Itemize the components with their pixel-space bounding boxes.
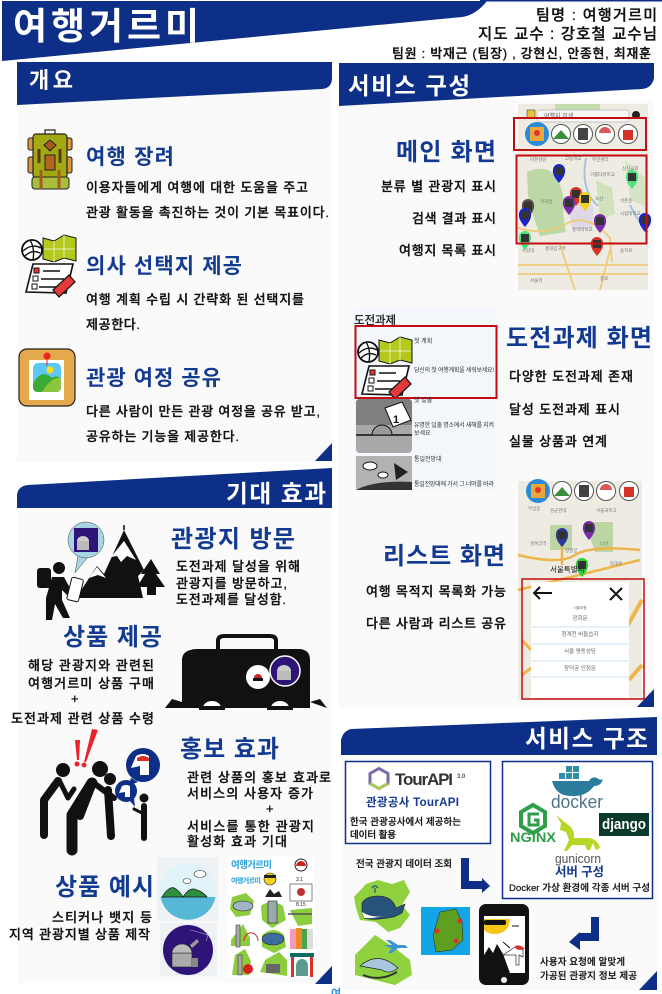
challenge screen screenshot: 첫 계획 (414, 337, 432, 345)
text: site visit: 도전과제 달성을 위해 (176, 559, 300, 574)
heading: product examples: 상품 예시 (55, 874, 154, 901)
text: product supply: + (71, 691, 79, 706)
structure header (341, 717, 657, 755)
main screen map screenshot: 여행지 검색 (544, 112, 573, 120)
challenge screen screenshot: 보세요 (414, 429, 431, 437)
sticker sheet: 8.15 (296, 902, 306, 908)
text: challenge screen: 달성 도전과제 표시 (509, 402, 620, 417)
text: product supply: 도전과제 관련 상품 수령 (11, 711, 154, 726)
main screen map screenshot: 고등학교 (565, 155, 582, 162)
text: main screen: 여행지 목록 표시 (399, 243, 496, 258)
box: TourAPI: 3.0 (457, 774, 466, 780)
box: server: 서버 구성 (555, 865, 604, 879)
list screen screenshot (518, 479, 644, 700)
heading: travel promotion: 여행 장려 (86, 146, 174, 169)
badge: observatory (160, 923, 217, 976)
text: main screen: 분류 별 관광지 표시 (381, 179, 496, 194)
text: list screen: 다른 사람과 리스트 공유 (366, 616, 506, 631)
title: 여행거르미 (13, 6, 199, 47)
nginx logo (510, 805, 557, 845)
overview header (17, 62, 332, 105)
box: TourAPI: 한국 관광공사에서 제공하는 (350, 816, 461, 828)
main screen map screenshot: 거룰타워학교 (590, 171, 615, 178)
overview header: 개요 (29, 68, 73, 93)
text: promotion effect: 관련 상품의 홍보 효과로 (187, 770, 331, 785)
icon: black bag with badges (165, 636, 327, 708)
heading: challenge screen: 도전과제 화면 (506, 325, 652, 352)
heading: site visit: 관광지 방문 (171, 526, 295, 553)
arrow: to server (461, 858, 490, 893)
label: processed info: 가공된 관광지 정보 제공 (540, 970, 637, 982)
panel: overview (17, 62, 332, 462)
header banner (2, 0, 662, 61)
text: share itinerary: 다른 사람이 만든 관광 여정을 공유 받고, (86, 404, 320, 419)
text: share itinerary: 공유하는 기능을 제공한다. (86, 429, 239, 444)
text: travel promotion: 관광 활동을 촉진하는 것이 기본 목표이다. (86, 205, 329, 220)
text: site visit: 관광지를 방문하고, (176, 576, 287, 591)
team info: 팀명 : 여행거르미 (536, 7, 657, 24)
panel: expected effects (9, 468, 332, 984)
text: travel promotion: 이용자들에게 여행에 대한 도움을 주고 (86, 180, 308, 195)
text: product supply (11, 658, 154, 726)
list screen screenshot: 창경궁 (565, 547, 577, 553)
list screen screenshot: 경복궁역 (530, 540, 547, 547)
main screen map screenshot: 시립대학교 (620, 210, 641, 217)
sticker sheet: 여행거르미 (231, 876, 261, 885)
badge: island (157, 857, 218, 921)
icon: plan checklist (22, 235, 76, 297)
heading: share itinerary: 관광 여정 공유 (86, 367, 221, 390)
list screen screenshot: 서울과학고 (596, 507, 617, 514)
corner triangle (315, 966, 332, 984)
team info (392, 7, 657, 61)
main screen map screenshot: 종로 (600, 276, 608, 281)
box: server: Docker 가상 환경에 각종 서버 구성 (509, 882, 650, 894)
text: site visit (176, 559, 300, 607)
label: processed info (540, 956, 637, 982)
main screen map screenshot: 석촌동 (620, 197, 632, 204)
back arrow (534, 587, 552, 599)
team info: 팀원 : 박재근 (팀장) , 강현신, 안종현, 최재훈 (392, 46, 651, 61)
text: promotion effect: 활성화 효과 기대 (187, 834, 287, 849)
django logo: django (602, 816, 646, 833)
icon: whale sticker (354, 880, 410, 932)
main screen map screenshot: 상신교회 (622, 165, 639, 172)
main screen map screenshot: 석치골 (540, 198, 552, 205)
box: TourAPI (346, 762, 490, 844)
main screen map screenshot: 아현성당 (530, 156, 547, 163)
challenge screen screenshot: 당신의 첫 여행계획을 세워보세요! (414, 366, 494, 374)
box: server (502, 762, 652, 898)
box: TourAPI: 관광공사 TourAPI (366, 796, 459, 809)
text: list screen (366, 584, 506, 631)
main screen map screenshot: 서울역 (530, 277, 542, 284)
list screen screenshot: 부암동 (528, 505, 540, 512)
docker logo: docker (551, 792, 603, 812)
box: TourAPI: TourAPI (395, 770, 453, 789)
text: decision options: 여행 계획 수립 시 간략화 된 선택지를 (86, 292, 304, 307)
text: product examples: 지역 관광지별 상품 제작 (9, 927, 150, 942)
team info: 지도 교수 : 강호철 교수님 (478, 25, 657, 43)
text: main screen: 검색 결과 표시 (412, 211, 496, 226)
nginx logo: NGINX (510, 829, 557, 845)
list screen screenshot: 서울특별시 (550, 564, 584, 574)
text: challenge screen (509, 369, 633, 449)
icon: airport sticker (355, 935, 412, 985)
corner triangle (639, 971, 657, 990)
sticker sheet (228, 856, 315, 978)
sticker sheet: 3.1 (296, 877, 303, 883)
django logo (599, 813, 649, 836)
main screen map screenshot: 을지로 (620, 247, 632, 254)
text: travel promotion (86, 180, 329, 220)
icon: hiker and mountains (37, 522, 165, 620)
panel: service structure (341, 717, 657, 990)
icon: Korea map (421, 907, 470, 955)
challenge screen screenshot: 통일전망대 (414, 455, 442, 463)
heading: decision options: 의사 선택지 제공 (86, 255, 242, 278)
unicorn logo (555, 815, 601, 866)
text: challenge screen: 다양한 도전과제 존재 (509, 369, 633, 384)
challenge screen screenshot: 첫 일출 (414, 396, 433, 404)
text: main screen (381, 179, 496, 258)
heading: product supply: 상품 제공 (63, 624, 162, 651)
icon: backpack (28, 130, 72, 189)
text: site visit: 도전과제를 달성함. (176, 592, 286, 607)
text: product examples (9, 910, 152, 942)
icon: photo pin (19, 349, 75, 406)
text: list screen: 여행 목적지 목록화 가능 (366, 584, 506, 599)
bubble with observatory (68, 522, 104, 573)
effects header: 기대 효과 (226, 481, 326, 508)
main screen map screenshot (514, 104, 651, 290)
text: challenge screen: 실물 상품과 연계 (509, 434, 607, 449)
label: processed info: 사용자 요청에 알맞게 (540, 956, 625, 968)
main screen map screenshot: 홍대입구역 (545, 245, 566, 252)
list screen screenshot: 낙산 (600, 540, 608, 547)
challenge screen screenshot: 유명한 일출 명소에서 새해를 지켜 (414, 421, 494, 429)
main screen map screenshot: 주민센터 (592, 156, 609, 163)
structure header: 서비스 구조 (525, 726, 648, 753)
main screen map screenshot: 녹산 (595, 195, 603, 202)
text: promotion effect: 서비스의 사용자 증가 (187, 786, 313, 801)
list screen screenshot: 서울 명동성당 (564, 647, 596, 655)
text: promotion effect: 서비스를 통한 관광지 (187, 819, 314, 834)
heading: promotion effect: 홍보 효과 (180, 736, 279, 763)
challenge screen screenshot: 도전과제 (354, 314, 396, 327)
sticker sheet: 여행거르미 (231, 859, 272, 871)
list screen screenshot: 청계천 버들습지 (562, 630, 598, 638)
panel: service composition (339, 63, 654, 707)
main screen map screenshot: 홍익대학교 (572, 226, 593, 233)
text: product supply: 여행거르미 상품 구매 (28, 676, 154, 691)
text: decision options: 제공한다. (86, 317, 140, 332)
box: TourAPI: 데이터 활용 (350, 829, 396, 841)
corner triangle (637, 689, 654, 707)
list screen screenshot: 서울여행 (574, 605, 586, 610)
unicorn logo: gunicorn (555, 852, 601, 866)
list screen screenshot: 창덕궁 인정문 (564, 664, 596, 672)
exclamation marks (74, 729, 98, 768)
composition header (339, 63, 654, 106)
effects header (17, 468, 332, 508)
text: share itinerary (86, 404, 320, 444)
arrow: to phone (569, 917, 599, 950)
text: product examples: 스티커나 뱃지 등 (52, 910, 152, 925)
main screen map screenshot: 서강대 (522, 247, 534, 254)
text: decision options (86, 292, 304, 332)
icon: phone app (479, 904, 529, 985)
heading: list screen: 리스트 화면 (383, 543, 505, 570)
text: promotion effect: + (266, 801, 274, 816)
list screen screenshot: 동대문 (610, 560, 622, 567)
list screen screenshot: 광화문 (572, 615, 588, 622)
close icon (610, 588, 622, 600)
corner triangle (315, 443, 332, 461)
label: data query: 전국 관광지 데이터 조회 (356, 858, 452, 870)
text: product supply: 해당 관광지와 관련된 (28, 658, 154, 673)
challenge screen screenshot: 통일전망대에 가서 그 너머를 바라 (414, 480, 494, 488)
icon: people and phone (44, 729, 160, 850)
docker logo (551, 766, 603, 812)
red highlights (514, 118, 646, 244)
challenge screen screenshot (354, 308, 497, 490)
heading: main screen: 메인 화면 (396, 139, 496, 166)
challenge screen screenshot: 1 (393, 414, 399, 426)
composition header: 서비스 구성 (348, 73, 470, 99)
bubbles (115, 748, 160, 807)
list screen screenshot: 성균관대 (550, 507, 567, 514)
text: promotion effect (187, 770, 331, 849)
